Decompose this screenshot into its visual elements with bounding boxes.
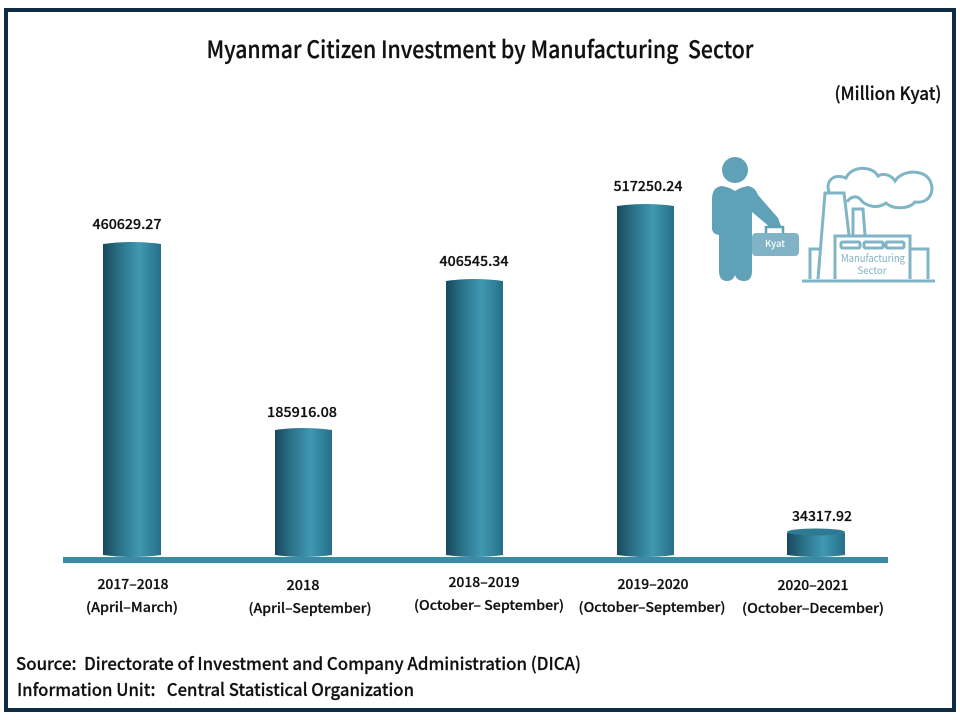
unit label: (Million Kyat): [834, 80, 942, 106]
bar: 2020–2021: [787, 506, 852, 557]
bar: 2018–2019: 406545.34: [440, 251, 509, 271]
category labels: (April–September): [248, 597, 372, 617]
bar: 2020–2021: 34317.92: [792, 506, 852, 526]
category labels: 2019–2020: [618, 573, 689, 593]
chimneys: [818, 193, 849, 279]
category labels: 2020–2021: [778, 574, 848, 594]
category labels: (October–December): [742, 597, 884, 617]
category labels: 2018–2019: [448, 571, 520, 591]
icon: factory: Sector: [858, 262, 887, 277]
category labels: 2017–2018: [98, 573, 169, 593]
smoke: [828, 168, 932, 208]
category labels: (October–September): [578, 596, 726, 616]
category labels: [86, 571, 884, 617]
information unit note: Information Unit: Central Statistical Organization: [17, 677, 414, 702]
bar: 2018: [267, 402, 337, 557]
bar: 2017–2018: 460629.27: [92, 214, 162, 234]
bar: 2018–2019: [440, 251, 509, 557]
source note: Source: Directorate of Investment and Company Administration (DICA): [16, 651, 581, 676]
building: [835, 236, 910, 279]
icon: factory: Manufacturing: [841, 251, 905, 266]
title: Myanmar Citizen Investment by Manufacturing Sector: [206, 30, 754, 65]
bar: 2019–2020: 517250.24: [614, 176, 683, 196]
bar chart: [63, 176, 888, 617]
icon: businessman with briefcase: [712, 157, 799, 281]
icon: factory: [802, 168, 935, 281]
category labels: (April–March): [86, 596, 178, 616]
category labels: (October– September): [414, 594, 564, 614]
bar: 2018: 185916.08: [267, 402, 337, 422]
bar: 2019–2020: [614, 176, 683, 557]
baseline axis: [63, 557, 888, 563]
category labels: 2018: [286, 574, 320, 594]
briefcase: Kyat: [765, 236, 785, 250]
bar: 2017–2018: [92, 214, 162, 557]
